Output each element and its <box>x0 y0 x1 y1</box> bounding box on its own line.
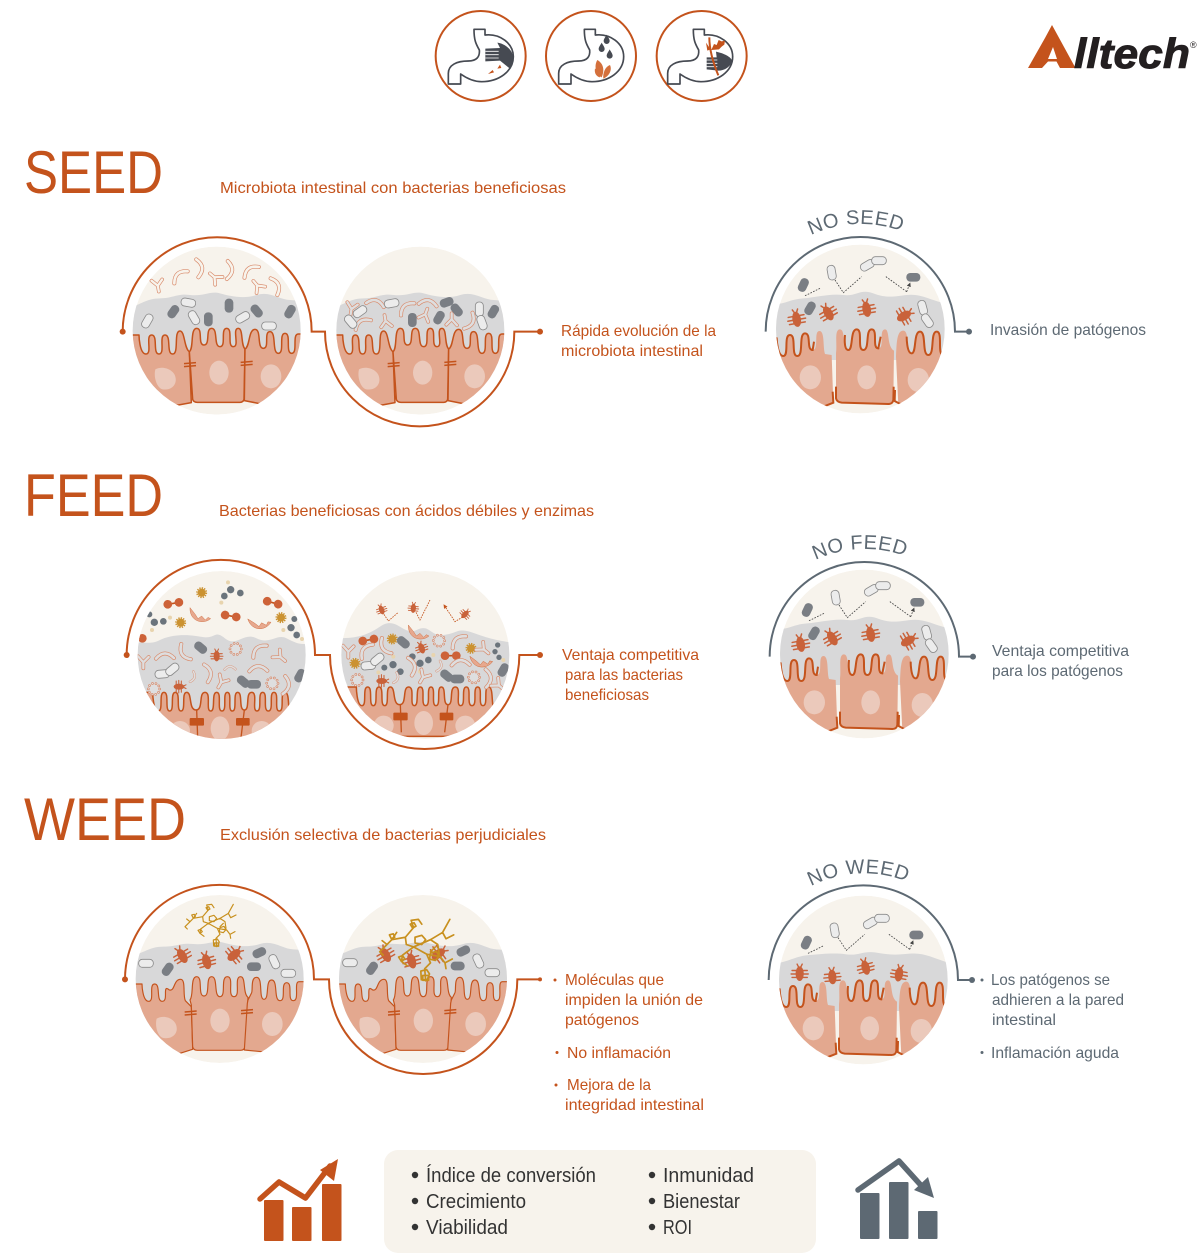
list: no weed effects: adhieren a la pared <box>992 992 1124 1009</box>
text: feed result: beneficiosas <box>565 687 649 704</box>
logo: Alltech: ® <box>1190 40 1197 50</box>
list: no weed effects: Inflamación aguda <box>991 1045 1119 1062</box>
circle: before weed <box>130 895 313 1063</box>
circle: after seed <box>334 247 514 415</box>
connector dots: feed <box>124 652 543 658</box>
label: NO FEED: NO FEED <box>812 535 906 560</box>
panel: WEED <box>24 786 1124 1114</box>
panel: FEED <box>24 462 1130 750</box>
heading: WEED: WEED <box>24 786 186 853</box>
list: right column: Bienestar <box>663 1191 740 1213</box>
list: weed benefits: Moléculas que <box>565 972 664 989</box>
list: left column <box>412 1164 596 1239</box>
circle: before feed <box>127 571 310 742</box>
list: weed benefits: impiden la unión de <box>565 992 703 1009</box>
list: weed benefits: patógenos <box>565 1012 639 1029</box>
connector dots: weed <box>122 976 542 982</box>
list: weed benefits: Mejora de la <box>567 1077 651 1094</box>
subtitle: seed: Microbiota intestinal con bacterias beneficiosas <box>220 180 566 197</box>
connector dots: seed <box>120 329 543 335</box>
icon: stomach with hand <box>436 11 526 101</box>
icon: stomach with drops and leaves <box>546 11 636 101</box>
text: feed result <box>562 647 699 704</box>
diagram: NO FEED <box>768 535 976 738</box>
list: no weed effects: intestinal <box>992 1012 1056 1029</box>
text: seed result <box>561 323 716 360</box>
subtitle: weed: Exclusión selectiva de bacterias perjudiciales <box>220 827 546 844</box>
text: seed result: Rápida evolución de la <box>561 323 716 340</box>
text: feed result: Ventaja competitiva <box>562 647 699 664</box>
header: stomach icons <box>436 11 747 101</box>
list: no weed effects <box>980 972 1124 1062</box>
list: weed benefits <box>554 972 704 1114</box>
list: right column <box>649 1165 754 1239</box>
list: right column: Inmunidad <box>663 1165 754 1187</box>
circle: before seed <box>130 247 310 415</box>
icon: rising bar chart <box>260 1159 342 1241</box>
circle: after feed <box>340 571 514 739</box>
icon: stomach with hand and plant <box>657 11 747 101</box>
diagram: seed circles <box>120 237 543 426</box>
icon: falling bar chart <box>858 1161 938 1239</box>
list: left column: Viabilidad <box>426 1217 508 1239</box>
connector arc: weed <box>125 885 540 1074</box>
logo: Alltech <box>1028 25 1197 77</box>
heading: FEED: FEED <box>24 462 163 529</box>
panel: performance list <box>384 1150 816 1253</box>
text: feed result: para las bacterias <box>565 667 683 684</box>
list: left column: Crecimiento <box>426 1191 526 1213</box>
diagram: feed circles <box>124 560 543 749</box>
text: no feed result <box>992 643 1129 680</box>
list: no weed effects: Los patógenos se <box>991 972 1110 989</box>
text: no feed result: para los patógenos <box>992 663 1123 680</box>
connector arc: seed <box>123 237 540 426</box>
connector arc: feed <box>127 560 540 749</box>
label: NO WEED: NO WEED <box>807 859 908 886</box>
circle: after weed <box>333 895 517 1063</box>
text: no feed result: Ventaja competitiva <box>992 643 1129 660</box>
list: right column: ROI <box>663 1217 692 1239</box>
diagram: NO WEED <box>768 859 975 1064</box>
text: seed result: microbiota intestinal <box>561 343 703 360</box>
list: left column: Índice de conversión <box>426 1164 596 1187</box>
diagram: NO SEED <box>764 210 972 414</box>
diagram: weed circles <box>122 885 542 1074</box>
list: weed benefits: No inflamación <box>567 1045 671 1062</box>
panel: SEED <box>24 139 1146 428</box>
list: weed benefits: integridad intestinal <box>565 1097 704 1114</box>
label: NO SEED: NO SEED <box>807 210 903 234</box>
heading: SEED: SEED <box>24 139 163 206</box>
text: no seed result: Invasión de patógenos <box>990 322 1146 339</box>
subtitle: feed: Bacterias beneficiosas con ácidos débiles y enzimas <box>219 503 594 520</box>
logo: Alltech: lltech <box>1074 30 1190 77</box>
